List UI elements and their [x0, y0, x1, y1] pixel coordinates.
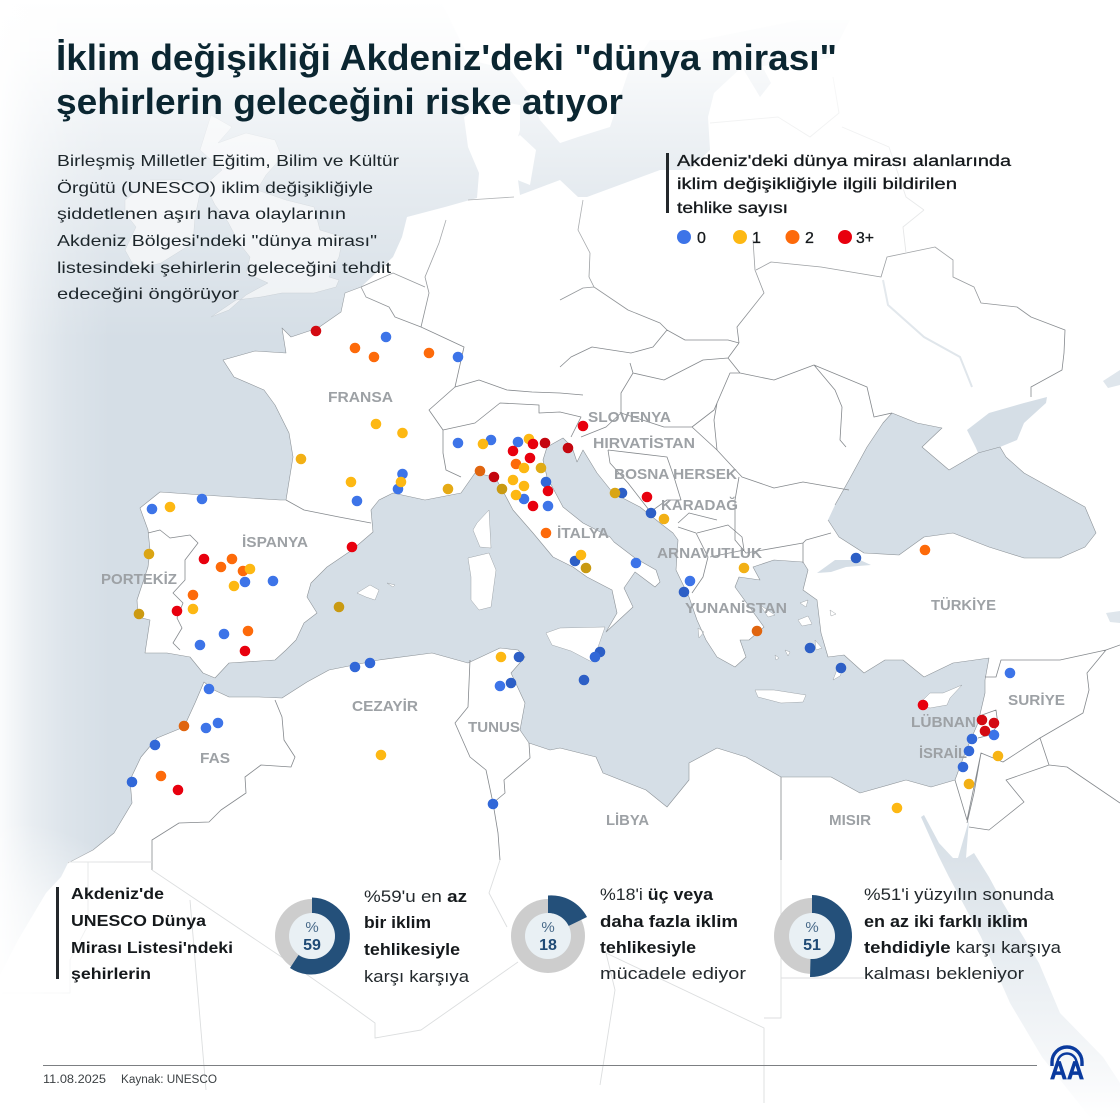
land: Corsica: [473, 510, 491, 548]
bottom section heading: Akdeniz'de: [71, 886, 164, 903]
country labels: TÜRKİYE: [931, 597, 996, 614]
legend title: iklim değişikliğiyle ilgili bildirilen: [677, 176, 957, 193]
fade: left edge: [0, 0, 110, 1120]
fade: lower left ocean: [0, 820, 190, 1120]
coast outlines: [68, 287, 1096, 863]
donut: 51 percent: 51: [803, 937, 821, 954]
donut: 51 percent: [774, 895, 852, 977]
stat text: 18 percent: [600, 885, 746, 983]
country labels: HIRVATİSTAN: [593, 435, 695, 452]
legend item: 0: 0: [697, 230, 706, 247]
country labels: MISIR: [829, 812, 871, 829]
country labels: YUNANİSTAN: [685, 600, 787, 617]
legend item: 2: [786, 230, 814, 247]
sea: Black Sea and Azov: [828, 397, 1096, 558]
source: Kaynak: UNESCO: [121, 1074, 217, 1086]
sea: Atlantic, North Sea and Baltic: [0, 0, 850, 975]
title: İklim değişikliği Akdeniz'deki "dünya mirası": [56, 37, 837, 78]
map markers: North Africa: [127, 652, 902, 813]
country labels: [101, 389, 1065, 829]
donut: 59 percent: %: [305, 919, 319, 936]
stat text: 51 percent: %51'i yüzyılın sonunda: [864, 885, 1055, 904]
map markers: Italy: [453, 421, 641, 685]
intro paragraph: Birleşmiş Milletler Eğitim, Bilim ve Kültür: [57, 153, 400, 170]
donut: 51 percent: %: [805, 919, 819, 936]
stat text: 59 percent: %59'u en az: [364, 887, 467, 906]
fade: top of map: [0, 0, 1120, 340]
country labels: CEZAYİR: [352, 698, 418, 715]
country labels: İTALYA: [557, 525, 609, 542]
legend item: 1: 1: [752, 230, 761, 247]
land: Denmark islands: [500, 135, 536, 185]
country labels: İSRAİL: [919, 745, 967, 762]
stat text: 51 percent: [864, 885, 1062, 983]
stat text: 18 percent: tehlikesiyle: [600, 938, 696, 957]
legend title: [677, 153, 1011, 217]
land: Aegean islands: [698, 600, 843, 680]
stat text: 51 percent: en az iki farklı iklim: [864, 912, 1028, 931]
bottom section heading: UNESCO Dünya: [71, 913, 206, 930]
intro paragraph: edeceğini öngörüyor: [57, 286, 240, 303]
country labels: KARADAĞ: [661, 496, 738, 514]
stat text: 18 percent: mücadele ediyor: [600, 964, 746, 983]
map markers: Balkans and Greece: [610, 488, 846, 673]
country labels: LİBYA: [606, 812, 649, 829]
land: Sardinia: [468, 553, 496, 610]
legend item: 0: [677, 230, 706, 247]
country labels: BOSNA HERSEK: [614, 466, 737, 483]
lakes and rivers: [1103, 370, 1120, 623]
donut: 18 percent: [511, 895, 587, 973]
intro paragraph: Örgütü (UNESCO) iklim değişikliğiyle: [57, 179, 373, 197]
stat text: 59 percent: [364, 887, 470, 986]
icon: Anadolu Agency logo: AA: [1050, 1057, 1084, 1085]
bottom section heading: Mirası Listesi'ndeki: [71, 940, 233, 957]
land: Crete: [755, 690, 806, 703]
country labels: SLOVENYA: [588, 409, 671, 426]
country labels: FAS: [200, 750, 230, 767]
country labels: İSPANYA: [242, 534, 308, 551]
legend title: tehlike sayısı: [677, 200, 788, 217]
country labels: TUNUS: [468, 719, 520, 736]
bottom section heading: [56, 886, 233, 983]
sea: Marmara: [817, 560, 871, 573]
map markers: Spain and Portugal: [134, 494, 357, 656]
land: Sicily: [546, 627, 605, 662]
donut: 18 percent: %: [541, 919, 555, 936]
sea: Mediterranean: [204, 438, 989, 807]
country labels: ARNAVUTLUK: [657, 545, 762, 562]
sea: Red Sea: [921, 815, 1120, 1120]
stat text: 18 percent: %18'i üç veya: [600, 885, 714, 904]
country borders: [148, 197, 1120, 870]
map markers: France: [296, 326, 463, 506]
northern borders, faded: [710, 77, 924, 253]
intro paragraph: Akdeniz Bölgesi'ndeki "dünya mirası": [57, 233, 377, 250]
bottom section heading: şehirlerin: [71, 966, 151, 983]
title: şehirlerin geleceğini riske atıyor: [56, 81, 623, 122]
stat text: 51 percent: kalması bekleniyor: [864, 964, 1024, 983]
stat text: 51 percent: tehdidiyle karşı karşıya: [864, 938, 1062, 957]
legend item: 1: [733, 230, 761, 247]
country labels: FRANSA: [328, 389, 393, 406]
legend bar: [666, 153, 669, 213]
donut: 18 percent: 18: [539, 937, 557, 954]
stat text: 59 percent: tehlikesiyle: [364, 940, 460, 959]
land: Great Britain: [200, 115, 343, 317]
intro paragraph: şiddetlenen aşırı hava olaylarının: [57, 206, 346, 223]
donut: 59 percent: [275, 898, 350, 974]
land: Ireland: [125, 180, 200, 270]
legend item: 2: 2: [805, 230, 814, 247]
stat text: 59 percent: karşı karşıya: [364, 967, 470, 986]
land: Balearic islands: [339, 583, 395, 610]
country labels: PORTEKİZ: [101, 571, 177, 588]
date: 11.08.2025: [43, 1074, 106, 1086]
title: [56, 37, 837, 122]
intro paragraph: listesindeki şehirlerin geleceğini tehdit: [57, 260, 392, 277]
donut: 59 percent: 59: [303, 937, 321, 954]
legend: [666, 153, 1011, 247]
legend item: 3+: [838, 230, 874, 247]
country labels: LÜBNAN: [911, 714, 976, 731]
intro paragraph: [57, 153, 400, 303]
Saharan borders, faded: [0, 860, 864, 1103]
legend item: 3+: 3+: [856, 230, 874, 247]
map markers: Türkiye and Levant: [851, 545, 1015, 789]
legend title: Akdeniz'deki dünya mirası alanlarında: [677, 153, 1011, 170]
land: Cyprus: [918, 685, 962, 708]
stat text: 59 percent: bir iklim: [364, 913, 431, 932]
stat text: 18 percent: daha fazla iklim: [600, 912, 738, 931]
country labels: SURİYE: [1008, 692, 1065, 709]
